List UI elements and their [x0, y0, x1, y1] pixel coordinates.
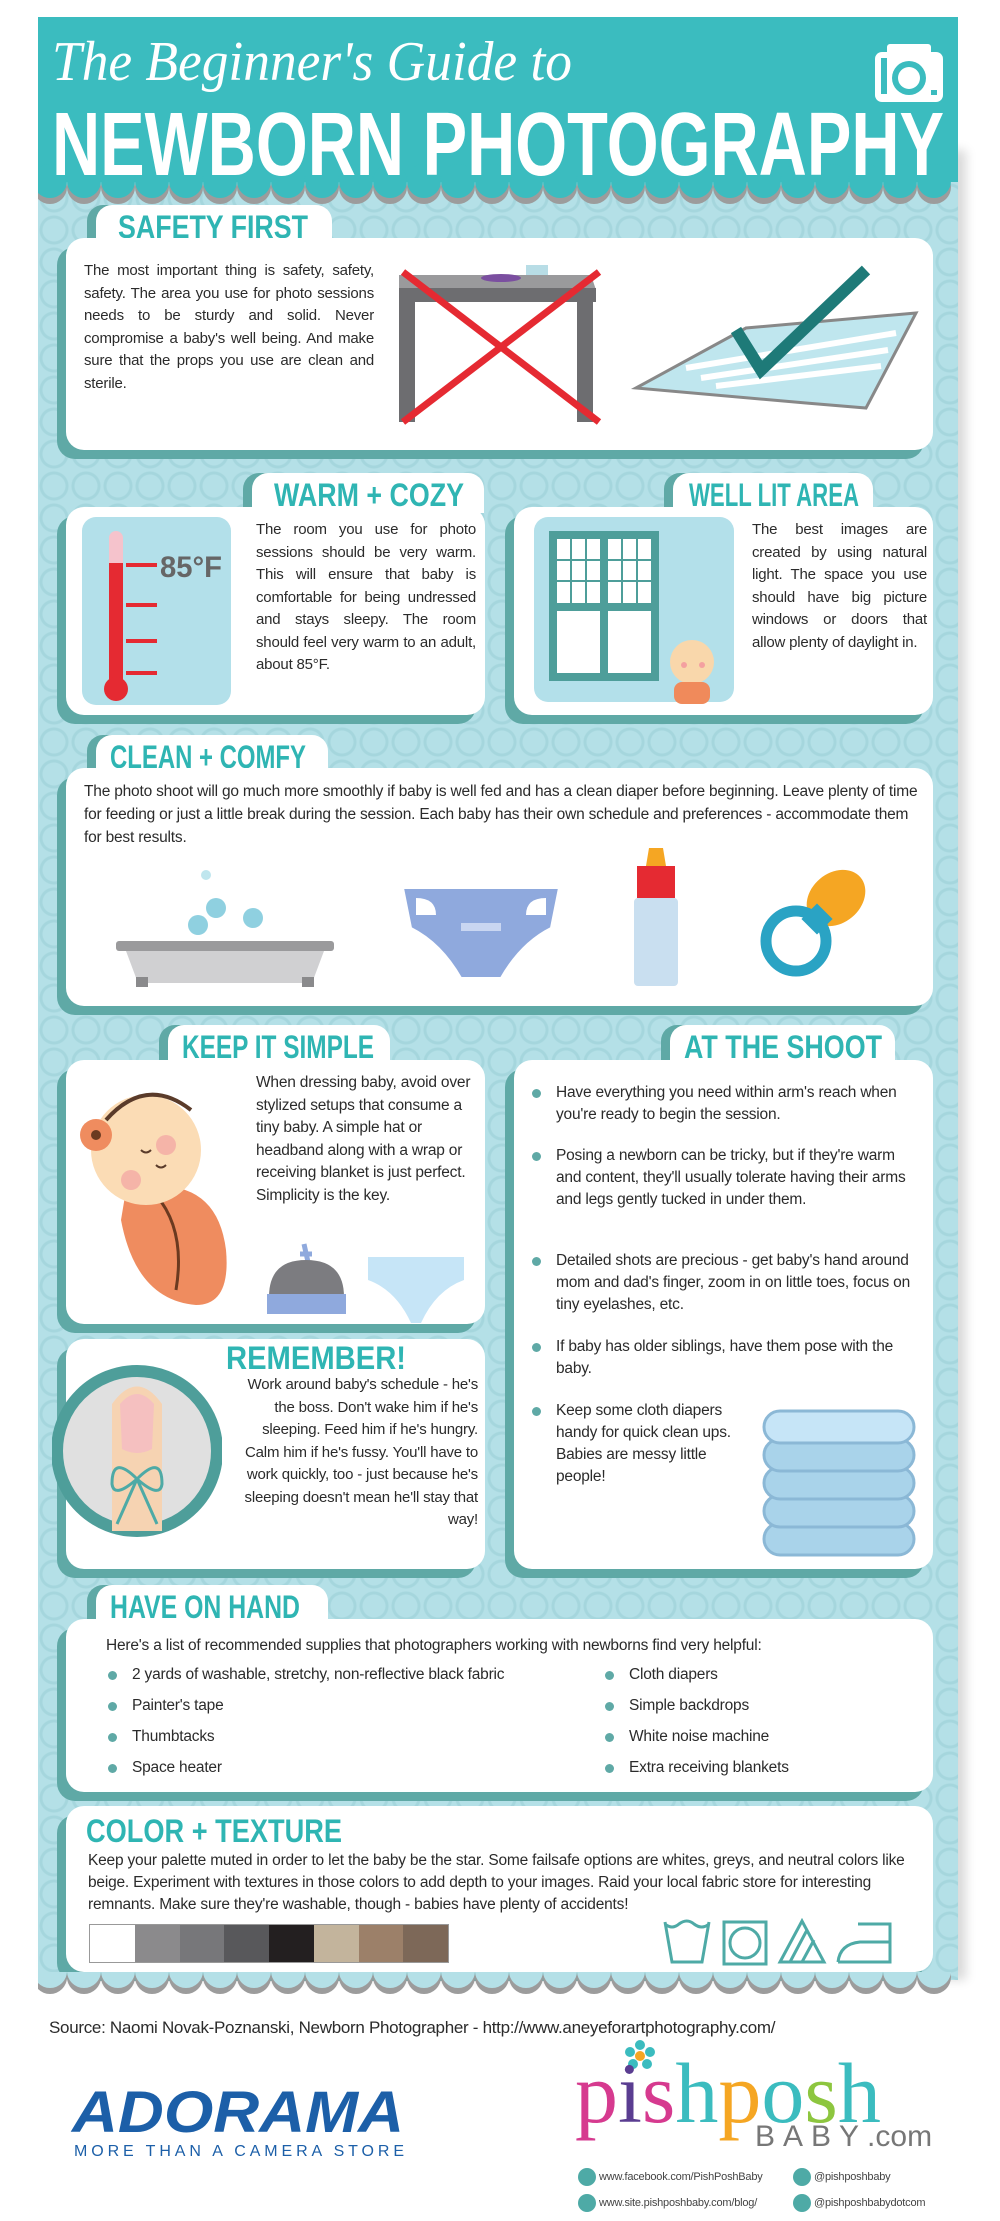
logo: adorama: MORE THAN A CAMERA STORE [74, 2143, 404, 2160]
bullets: at the shoot: Detailed shots are precious - get baby's hand around mom and dad's finger, zoom in on little toes, focus on tiny eyelashes, etc. [556, 1252, 910, 1313]
bullets: right column: Extra receiving blankets [629, 1759, 789, 1776]
text: remember: Work around baby's schedule - he's the boss. Don't wake him if he's sleeping. Feed him if he's hungry. Calm him if he's fussy. You'll have to work quickly, too - just because he's sleeping doesn't mean he'll stay that way! [245, 1376, 478, 1528]
text: clean: The photo shoot will go much more smoothly if baby is well fed and has a clean diaper before beginning. Leave plenty of time for feeding or just a little break during the session. Each baby has their own schedule and preferences - accommodate them for best results. [84, 783, 917, 846]
panel: keep it simple [66, 1060, 485, 1324]
source line: Source: Naomi Novak-Poznanski, Newborn Photographer - http://www.aneyeforartphotography.com/ [49, 2018, 775, 2037]
bullets: at the shoot: If baby has older siblings, have them pose with the baby. [556, 1338, 893, 1377]
bullets: right column: White noise machine [629, 1728, 769, 1745]
panel: warm + cozy [66, 507, 485, 715]
bullets: at the shoot: Posing a newborn can be tricky, but if they're warm and content, they'll usually tolerate having their arms and legs gently tucked in under them. [556, 1147, 906, 1208]
panel: at the shoot [514, 1060, 933, 1569]
icon: camera [875, 44, 943, 102]
subtitle: The Beginner's Guide to [52, 31, 572, 93]
icon: bathtub [116, 870, 334, 987]
text: warm: The room you use for photo sessions should be very warm. This will ensure that baby is comfortable for being undressed and stays sleepy. The room should feel very warm to an adult, about 85°F. [256, 521, 476, 673]
panel: well lit area [514, 507, 933, 715]
icon: window and baby [534, 517, 734, 702]
social links: www.site.pishposhbaby.com/blog/ [599, 2197, 757, 2209]
bullets: right column: Cloth diapers [629, 1666, 718, 1683]
social links: @pishposhbabydotcom [814, 2197, 925, 2209]
icon: thermometer [82, 517, 231, 705]
social links: @pishposhbaby [814, 2171, 890, 2183]
logo: pishposh baby: pishposh [575, 2045, 881, 2141]
icon: diaper stack [762, 1410, 916, 1556]
icon: thermometer: 85°F [160, 551, 222, 584]
bullets: right column: Simple backdrops [629, 1697, 749, 1714]
icon: diaper cover [368, 1257, 464, 1323]
panel: have on hand [66, 1619, 933, 1792]
header [38, 17, 958, 204]
text: color: Keep your palette muted in order to let the baby be the star. Some failsafe options are whites, greys, and neutral colors like beige. Experiment with textures in those colors to add depth to your images. Raid your local fabric store for interesting remnants. Make sure they're washable, though - babies have plenty of accidents! [88, 1852, 905, 1913]
icons: laundry symbols [664, 1918, 892, 1966]
text: well lit: The best images are created by using natural light. The space you use should have big picture windows or doors that allow plenty of daylight in. [752, 521, 927, 650]
logo: pishposh baby: BABY.com [755, 2120, 932, 2153]
bullets: left column: Space heater [132, 1759, 222, 1776]
panel: clean + comfy [66, 768, 933, 1006]
panel: remember [66, 1339, 485, 1569]
panel: safety first [66, 238, 933, 450]
bullets: left column: Thumbtacks [132, 1728, 214, 1745]
bullets: at the shoot: Keep some cloth diapers handy for quick clean ups. Babies are messy little people! [556, 1402, 731, 1485]
bullets: left column: Painter's tape [132, 1697, 224, 1714]
heading: remember: REMEMBER! [226, 1340, 406, 1376]
social links [578, 2168, 925, 2212]
bullets: at the shoot: Have everything you need within arm's reach when you're ready to begin the session. [556, 1084, 897, 1123]
icon: swaddled baby [80, 1092, 227, 1305]
icon: blanket check [631, 266, 918, 410]
bullets: left column [108, 1666, 504, 1776]
bullets: left column: 2 yards of washable, stretchy, non-reflective black fabric [132, 1666, 504, 1683]
logo: adorama: ADORAMA [70, 2080, 404, 2145]
text: intro: Here's a list of recommended supplies that photographers working with newborns find very helpful: [106, 1637, 762, 1654]
icon: pacifier [760, 870, 866, 976]
icon: finger with bow [52, 1365, 222, 1537]
text: keep simple: When dressing baby, avoid over stylized setups that consume a tiny baby. A simple hat or headband along with a wrap or receiving blanket is just perfect. Simplicity is the key. [256, 1074, 470, 1204]
icon: hat [267, 1244, 346, 1314]
swatches [89, 1924, 449, 1963]
panel: color + texture [66, 1806, 933, 1972]
social links: www.facebook.com/PishPoshBaby [599, 2171, 763, 2183]
text: safety: The most important thing is safety, safety, safety. The area you use for photo sessions needs to be sturdy and solid. Never compromise a baby's well being. And make sure that the props you use are clean and sterile. [84, 262, 374, 392]
icon: diaper [404, 889, 558, 977]
icon: bottle [634, 848, 678, 986]
bullets: right column [605, 1666, 789, 1776]
icon: crossed table [399, 265, 602, 425]
bottom scallops [38, 1972, 951, 1994]
bullets: at the shoot [532, 1084, 910, 1485]
